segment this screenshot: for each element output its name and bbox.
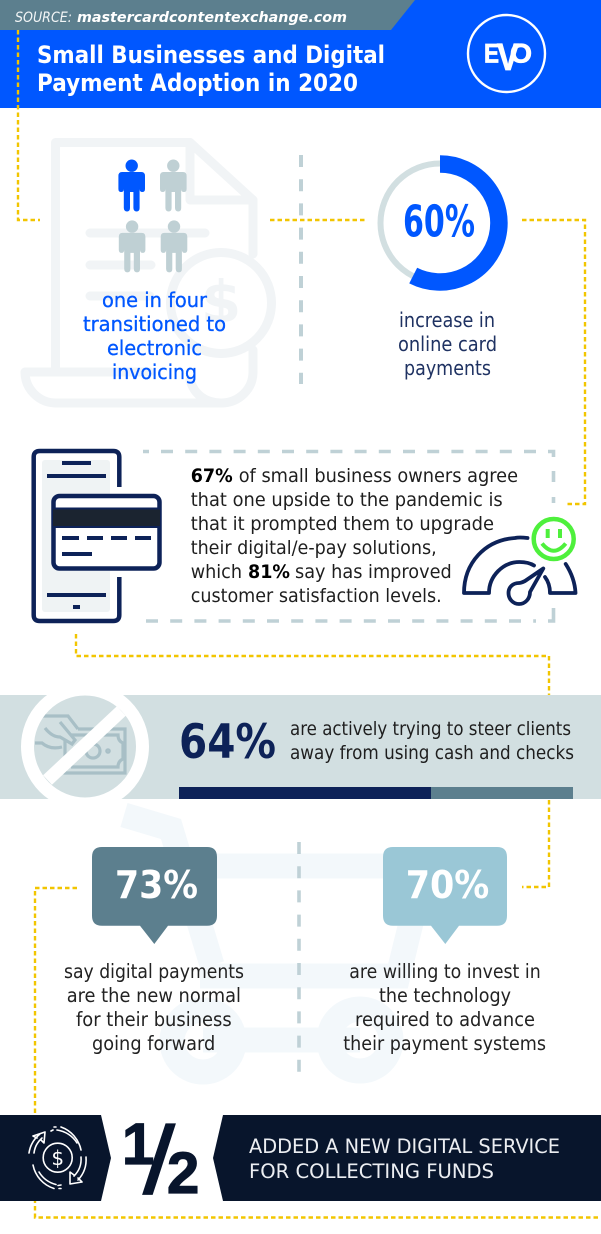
logo: EVO: O — [510, 38, 532, 68]
callout: 73% — [92, 847, 217, 944]
footer banner right: FOR COLLECTING FUNDS — [249, 1160, 494, 1183]
fraction: one half — [122, 1108, 199, 1214]
text: increase in online card payments: payments — [404, 356, 491, 380]
fraction: one half: / — [143, 1108, 175, 1214]
logo: EVO — [468, 15, 545, 92]
connector: bubble around footer — [35, 888, 601, 1218]
source tab: SOURCE: — [15, 10, 72, 26]
callout: 70%: 70% — [406, 863, 489, 907]
text: increase in online card payments: online card — [398, 332, 497, 356]
text: digital payments: for their business — [76, 1008, 232, 1031]
icon: phone with credit card — [34, 451, 160, 621]
text: one in four — [83, 288, 226, 384]
text: steer clients — [290, 718, 574, 764]
callout: 73%: 73% — [115, 863, 198, 907]
text: one in four: invoicing — [112, 360, 197, 384]
logo: EVO: E — [484, 38, 499, 68]
text: willing to invest: their payment systems — [343, 1032, 546, 1055]
title: Small Businesses and Digital — [37, 41, 385, 69]
footer banner right: ADDED A NEW DIGITAL SERVICE — [249, 1135, 560, 1158]
text: 67% paragraph: their digital/e-pay solutions, — [191, 538, 437, 559]
text: willing to invest: are willing to invest in — [349, 960, 541, 983]
icon: circular money arrows: $ — [51, 1146, 64, 1170]
text: digital payments — [64, 960, 244, 1055]
text: digital payments: going forward — [92, 1032, 215, 1055]
connector: header to invoice — [18, 30, 40, 220]
text: willing to invest — [343, 960, 546, 1055]
source tab: mastercardcontentexchange.com — [77, 10, 347, 26]
text: digital payments: are the new normal — [67, 984, 241, 1007]
connector: band to bubble — [522, 800, 549, 887]
icon: four people, one highlighted — [118, 160, 187, 272]
text: increase in online card payments: increase in — [399, 308, 495, 332]
panel: 64% band — [0, 689, 601, 804]
logo: EVO: V — [497, 37, 520, 79]
icon: invoice document background: $ — [201, 268, 241, 336]
text: one in four: transitioned to — [83, 312, 226, 336]
fraction: one half: 2 — [167, 1141, 199, 1206]
footer banner left — [0, 1115, 111, 1201]
footer banner right — [213, 1115, 601, 1201]
text: digital payments: say digital payments — [64, 960, 244, 983]
text: 67% paragraph: 67% — [191, 466, 233, 487]
text: increase in online card payments — [398, 308, 497, 380]
panel: 64% band: 64% — [179, 715, 276, 770]
icon: shopping cart background — [124, 815, 425, 1072]
header banner — [0, 0, 601, 108]
source tab — [0, 0, 415, 30]
text: 67% paragraph: customer satisfaction levels. — [191, 586, 442, 607]
bar chart: 64% progress — [179, 787, 573, 799]
callout: 70% — [383, 847, 507, 944]
text: 67% paragraph: that it prompted them to upgrade — [191, 514, 494, 535]
connector: donut to survey box — [522, 220, 585, 504]
text: 67% paragraph: that one upside to the pandemic is — [191, 490, 503, 511]
text: 67% paragraph: 81% — [248, 562, 290, 583]
text: one in four: one in four — [102, 288, 208, 312]
fraction: one half: 1 — [122, 1112, 154, 1177]
text: 67% paragraph — [191, 466, 518, 607]
connector: phone to cash band — [76, 634, 549, 695]
text: 67% paragraph: which — [191, 562, 242, 583]
text: 67% paragraph: say has improved — [295, 562, 452, 583]
text: willing to invest: required to advance — [355, 1008, 535, 1031]
icon: invoice document background — [25, 142, 272, 403]
chart: 60% donut — [380, 164, 500, 282]
title: Payment Adoption in 2020 — [37, 69, 358, 97]
chart: 60% donut: 60% — [403, 196, 475, 248]
icon: satisfaction gauge with smiley — [464, 519, 576, 604]
text: one in four: electronic — [107, 336, 202, 360]
title — [37, 41, 385, 97]
text: 67% paragraph: of small business owners agree — [239, 466, 518, 487]
icon: no cash — [28, 689, 142, 804]
panel: dashed survey box — [143, 452, 554, 621]
text: willing to invest: the technology — [379, 984, 511, 1007]
